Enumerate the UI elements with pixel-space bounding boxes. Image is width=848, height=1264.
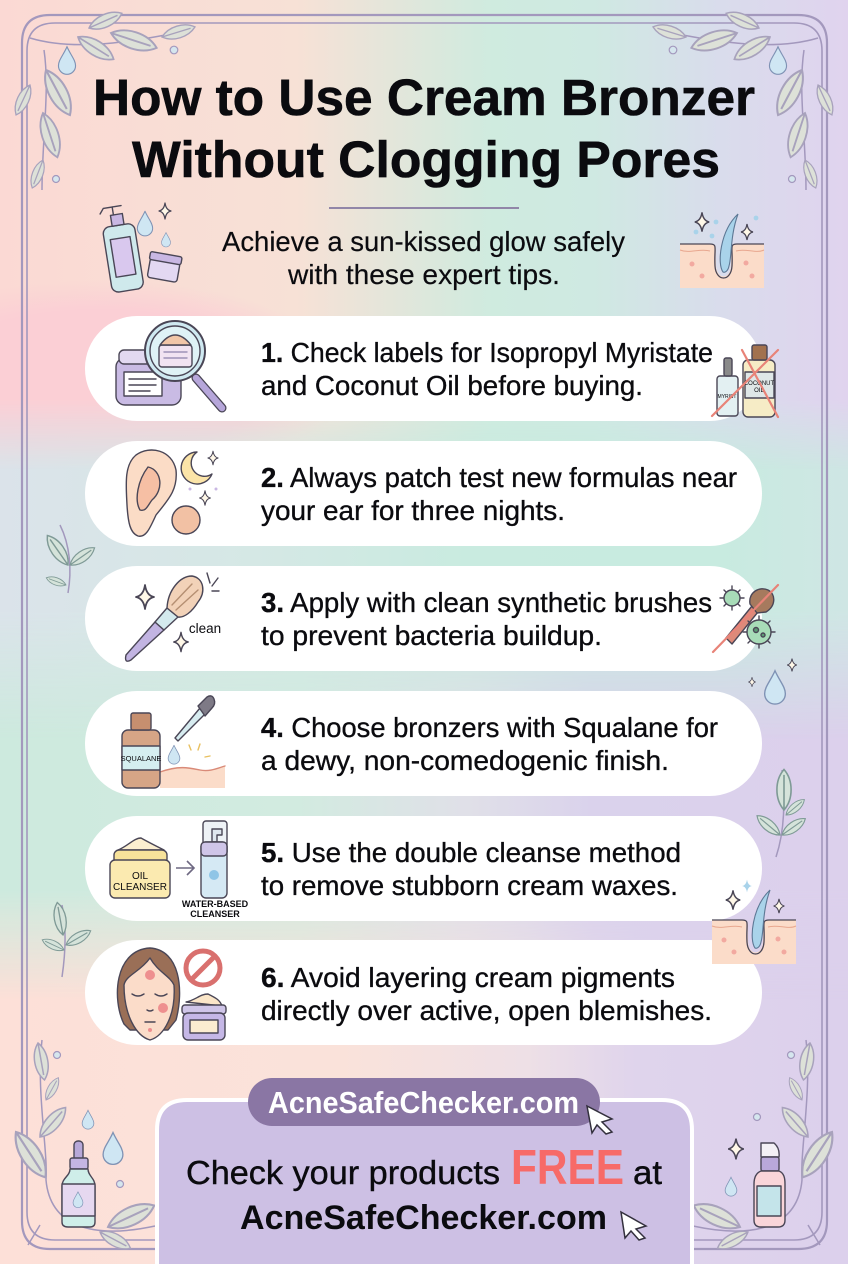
text: tip 2: 2. Always patch test new formulas near — [261, 462, 737, 493]
text: tip 5 — [261, 837, 681, 901]
floral corner: top right — [651, 8, 837, 190]
text: tip 6 — [261, 962, 712, 1026]
call to action panel — [157, 1100, 692, 1264]
text: tip 4: a dewy, non-comedogenic finish. — [261, 745, 669, 776]
icon: crossed-out oil bottles: MYRIST — [718, 394, 736, 400]
water drops and dots — [52, 46, 796, 1196]
icon: oil cleanser jar: CLEANSER — [113, 882, 167, 893]
icon: pill cursor — [587, 1106, 612, 1134]
icon: oil cleanser jar — [110, 838, 170, 898]
icon: oil cleanser jar: OIL — [132, 871, 148, 882]
icon: face with blemishes — [117, 948, 180, 1040]
icon: ear, moon and patch — [126, 450, 218, 536]
text: tip 2 — [261, 462, 737, 526]
text: tip 6: 6. Avoid layering cream pigments — [261, 962, 675, 993]
icon: clean synthetic brush: clean — [189, 621, 221, 636]
icon: crossed-out oil bottles: COCONUT — [744, 381, 774, 387]
text: tip 5: to remove stubborn cream waxes. — [261, 870, 678, 901]
side leaf sprig: right — [754, 770, 808, 857]
title: Without Clogging Pores — [132, 131, 720, 188]
icon: squalane bottle and dropper — [121, 696, 225, 788]
card 4 — [85, 691, 762, 796]
text: tip 1: 1. Check labels for Isopropyl Myristate — [261, 337, 713, 368]
icon: crossed-out oil bottles — [712, 345, 778, 417]
icon: water-based cleanser pump — [182, 821, 249, 919]
icon: prohibition sign — [186, 951, 220, 985]
icon: skin follicle right — [712, 880, 796, 964]
card 3 — [85, 566, 778, 671]
text: tip 5: 5. Use the double cleanse method — [261, 837, 681, 868]
icon: skin follicle top right — [680, 212, 764, 288]
floral corner: bottom left — [8, 1040, 158, 1254]
floral corner: bottom right — [690, 1040, 840, 1254]
side leaf sprig: left — [42, 525, 98, 593]
text: check products free: FREE — [511, 1141, 624, 1195]
text: tip 3: to prevent bacteria buildup. — [261, 620, 602, 651]
icon: sparkle bottom right — [728, 1139, 744, 1159]
card 5 — [85, 816, 762, 921]
floral corner: top left — [11, 8, 197, 190]
subtitle — [222, 226, 625, 290]
text: tip 2: your ear for three nights. — [261, 495, 565, 526]
text: tip 1 — [261, 337, 713, 401]
icon: dropper bottle bottom left — [62, 1141, 95, 1227]
icon: water-based cleanser pump: CLEANSER — [190, 909, 240, 919]
text: tip 4 — [261, 712, 718, 776]
card 1 — [85, 316, 778, 421]
icon: skincare bottle, drops and jar — [99, 203, 182, 293]
text: tip 4: 4. Choose bronzers with Squalane for — [261, 712, 718, 743]
side leaf sprig: lower left — [40, 901, 93, 977]
icon: water-based cleanser pump: WATER-BASED — [182, 899, 249, 909]
icon: crossed-out oil bottles: OIL — [754, 388, 764, 394]
text: tip 3 — [261, 587, 712, 651]
icon: cream jar — [182, 994, 226, 1040]
icon: cursor — [621, 1212, 646, 1240]
icon: pump bottle bottom right — [754, 1143, 785, 1227]
text: check products free — [186, 1141, 662, 1195]
card 2 — [85, 441, 762, 546]
subtitle: Achieve a sun-kissed glow safely — [222, 226, 625, 257]
website pill: AcneSafeChecker.com — [268, 1085, 579, 1120]
card 6 — [85, 940, 762, 1045]
website pill — [248, 1078, 612, 1134]
text: website: AcneSafeChecker.com — [240, 1199, 607, 1237]
icon: dirty brush and bacteria — [713, 585, 778, 652]
text: check products free: at — [633, 1154, 662, 1191]
text: check products free: Check your products — [186, 1154, 500, 1191]
text: tip 1: and Coconut Oil before buying. — [261, 370, 643, 401]
icon: clean synthetic brush — [126, 573, 221, 661]
subtitle: with these expert tips. — [287, 259, 560, 290]
title — [93, 69, 755, 188]
arrow — [176, 861, 194, 875]
text: tip 3: 3. Apply with clean synthetic brushes — [261, 587, 712, 618]
icon: drop and sparkles right — [748, 659, 797, 704]
title: How to Use Cream Bronzer — [93, 69, 755, 126]
icon: jar and magnifier — [116, 321, 222, 408]
text: tip 6: directly over active, open blemishes. — [261, 995, 712, 1026]
icon: squalane bottle and dropper: SQUALANE — [121, 754, 161, 763]
